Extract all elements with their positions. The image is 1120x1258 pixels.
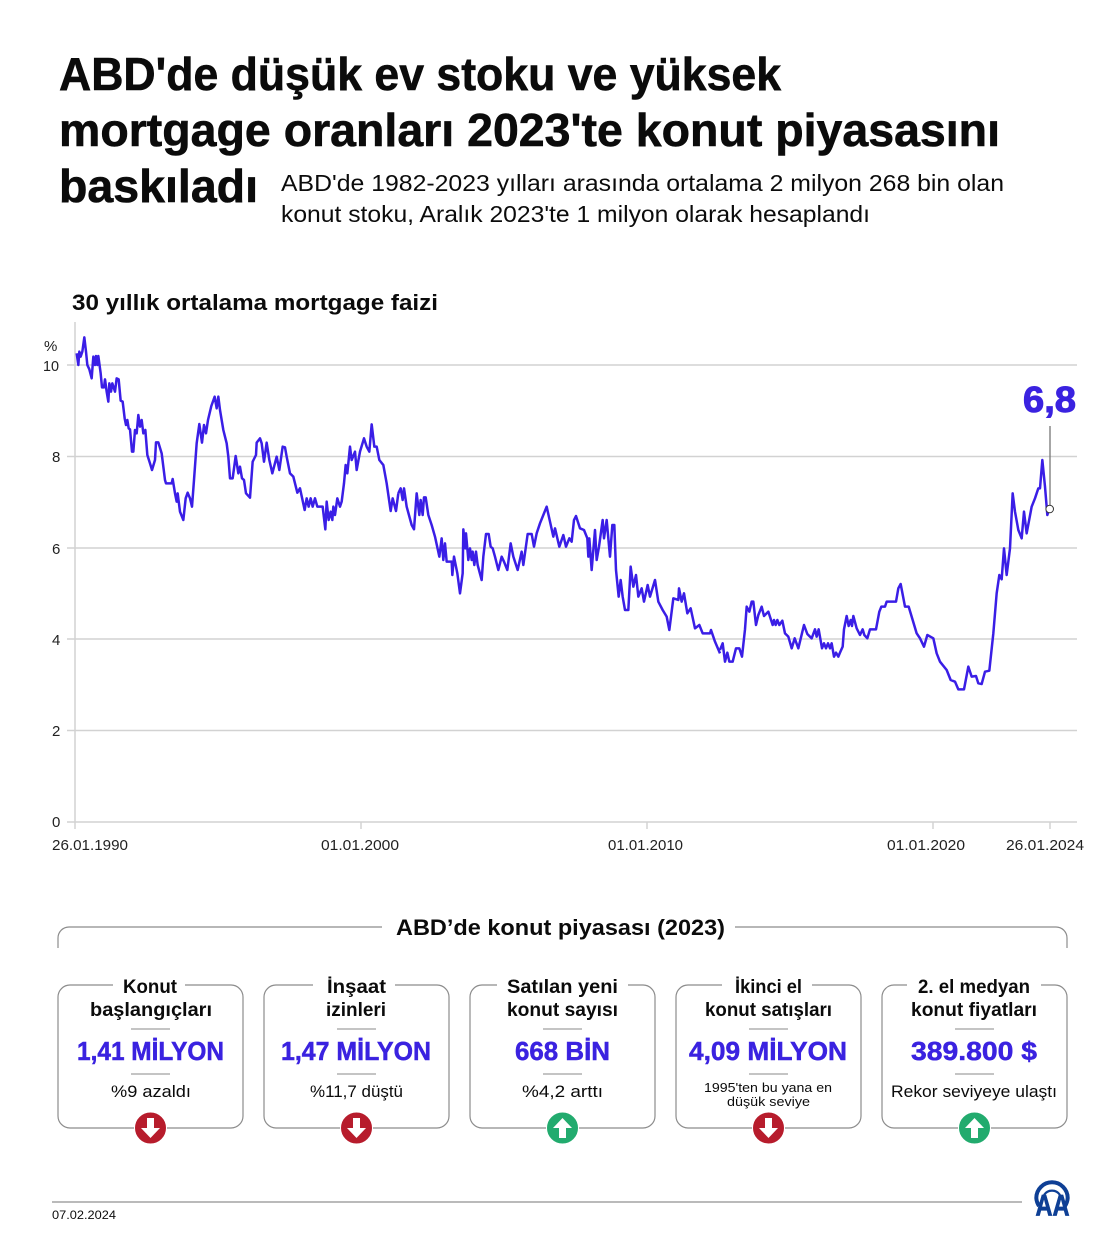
x axis labels: 26.01.1990 <box>52 837 128 854</box>
chart title: 30 yıllık ortalama mortgage faizi <box>72 290 438 315</box>
y axis labels: 2 <box>52 723 60 740</box>
callout: latest value 6,8 <box>1023 379 1076 513</box>
panel: ikinci el konut satışları: İkinci el <box>735 977 802 998</box>
panel: konut başlangıçları: Konut <box>123 977 178 998</box>
panel: 2. el medyan konut fiyatları: 2. el medyan <box>918 977 1030 998</box>
panel: inşaat izinleri: 1,47 MİLYON <box>281 1036 431 1066</box>
panel: konut başlangıçları: 1,41 MİLYON <box>77 1036 224 1066</box>
icon: AA logo: AA <box>1036 1190 1070 1222</box>
callout: latest value 6,8: 6,8 <box>1023 379 1076 420</box>
icon: down arrow <box>134 1112 166 1144</box>
icon: down arrow <box>752 1112 784 1144</box>
panel: inşaat izinleri: izinleri <box>326 1000 386 1021</box>
panel: 2. el medyan konut fiyatları: konut fiyatları <box>911 1000 1037 1021</box>
title <box>59 48 1000 212</box>
icon: up arrow <box>546 1112 578 1144</box>
panel: satılan yeni konut sayısı: %4,2 arttı <box>522 1082 603 1101</box>
x axis labels: 01.01.2020 <box>887 837 965 854</box>
title: mortgage oranları 2023'te konut piyasasını <box>59 104 1000 156</box>
subtitle: konut stoku, Aralık 2023'te 1 milyon olarak hesaplandı <box>281 201 870 227</box>
x axis labels: 01.01.2010 <box>608 837 683 854</box>
panel: ikinci el konut satışları: 1995'ten bu yana en <box>704 1080 832 1095</box>
panel: ikinci el konut satışları: 4,09 MİLYON <box>689 1036 847 1066</box>
x axis labels: 26.01.2024 <box>1006 837 1084 854</box>
y axis labels: % <box>44 338 57 355</box>
panel: ikinci el konut satışları <box>676 977 861 1144</box>
icon: down arrow <box>340 1112 372 1144</box>
panel: satılan yeni konut sayısı: Satılan yeni <box>507 977 618 998</box>
y axis labels: 4 <box>52 632 60 649</box>
title: baskıladı <box>59 160 258 212</box>
panel: konut başlangıçları: başlangıçları <box>90 1000 212 1021</box>
panel: ikinci el konut satışları: düşük seviye <box>727 1094 810 1109</box>
y axis labels <box>43 338 60 831</box>
panel: 2. el medyan konut fiyatları <box>882 977 1067 1144</box>
icon: AA logo <box>1036 1182 1070 1222</box>
x axis labels: 01.01.2000 <box>321 837 399 854</box>
line chart: 30-year mortgage rate <box>67 322 1077 829</box>
section bracket <box>58 927 1067 948</box>
panel: konut başlangıçları <box>58 977 243 1144</box>
panel: inşaat izinleri: İnşaat <box>327 977 387 998</box>
y axis labels: 6 <box>52 541 60 558</box>
icon: up arrow <box>958 1112 990 1144</box>
panel: 2. el medyan konut fiyatları: Rekor seviyeye ulaştı <box>891 1082 1057 1101</box>
panel: inşaat izinleri: %11,7 düştü <box>310 1082 403 1101</box>
panel: satılan yeni konut sayısı: konut sayısı <box>507 1000 618 1021</box>
subtitle <box>281 170 1004 227</box>
title: ABD'de düşük ev stoku ve yüksek <box>59 48 781 100</box>
date: 07.02.2024 <box>52 1210 117 1222</box>
y axis labels: 10 <box>43 358 59 375</box>
panel: konut başlangıçları: %9 azaldı <box>111 1082 191 1101</box>
y axis labels: 8 <box>52 449 60 466</box>
x axis labels <box>52 837 1084 854</box>
panel: satılan yeni konut sayısı <box>470 977 655 1144</box>
footer rule <box>52 1201 1022 1203</box>
panel: 2. el medyan konut fiyatları: 389.800 $ <box>911 1036 1038 1066</box>
panel: inşaat izinleri <box>264 977 449 1144</box>
panel: ikinci el konut satışları: konut satışları <box>705 1000 832 1021</box>
y axis labels: 0 <box>52 814 60 831</box>
panel: satılan yeni konut sayısı: 668 BİN <box>515 1036 610 1066</box>
section heading: ABD’de konut piyasası (2023) <box>396 915 725 940</box>
subtitle: ABD'de 1982-2023 yılları arasında ortalama 2 milyon 268 bin olan <box>281 170 1004 196</box>
